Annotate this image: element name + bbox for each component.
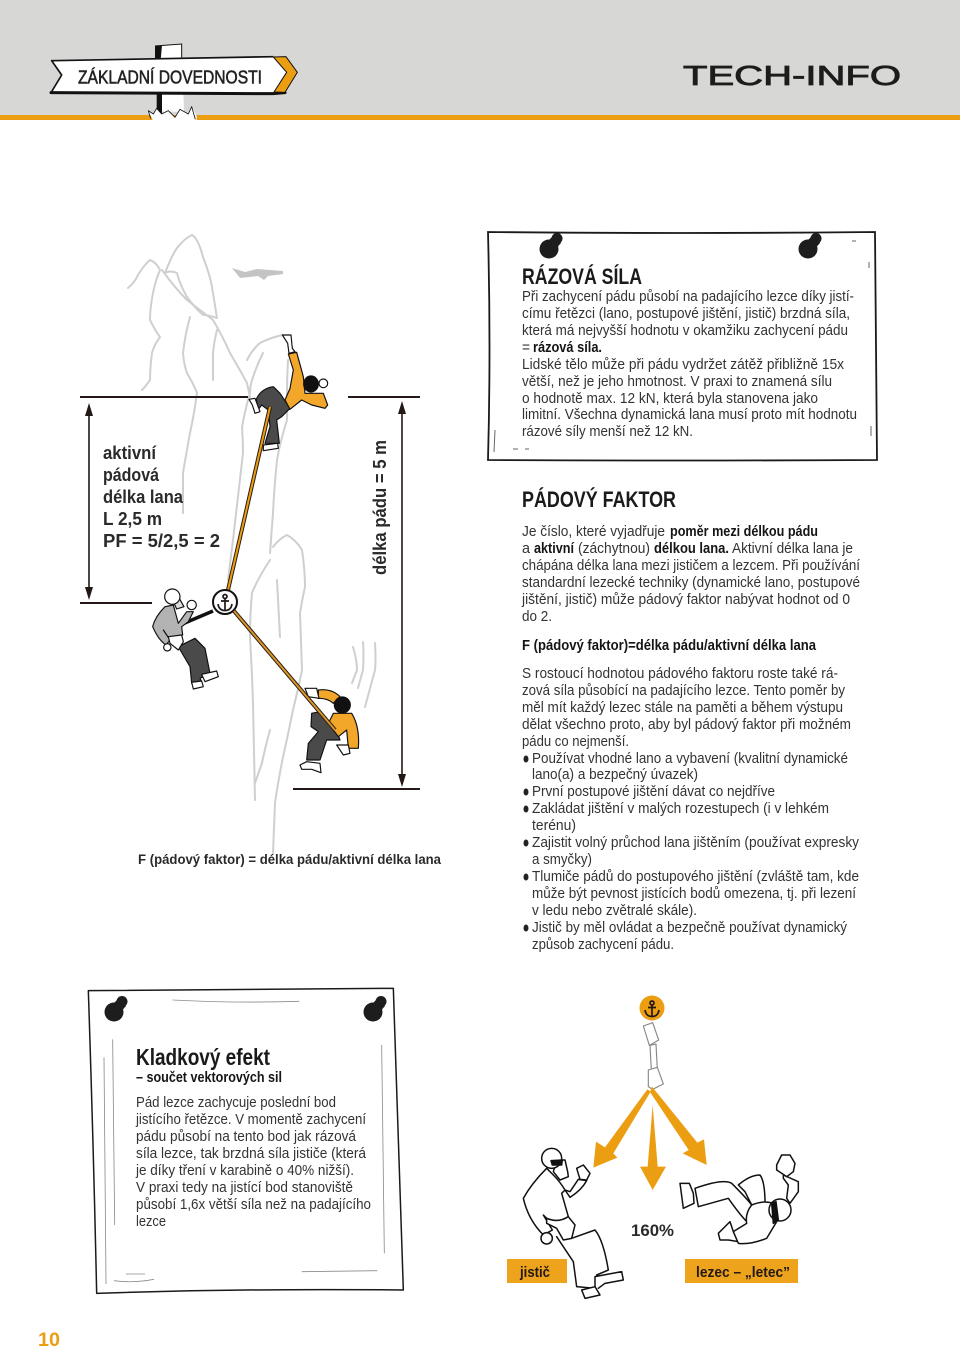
text block: která má nejvyšší hodnotu v okamžiku zachycení pádu xyxy=(522,322,848,339)
section: pádový faktor xyxy=(521,487,861,953)
mountain outlines xyxy=(128,235,376,853)
text block: rázové síly menší než 12 kN. xyxy=(522,423,693,440)
bullet list: Zajistit volný průchod lana jištěním (používat expresky xyxy=(532,834,859,851)
text block xyxy=(522,288,857,440)
pin xyxy=(540,233,562,258)
text block: poměr mezi délkou pádu xyxy=(670,523,818,540)
bullet list: lano(a) a bezpečný úvazek) xyxy=(532,766,698,783)
falling climber line drawing xyxy=(680,1155,798,1244)
force arrows xyxy=(593,1087,707,1190)
text block: chápána délka lana mezi jističem a lezcem. Při používání xyxy=(522,557,861,574)
pin xyxy=(104,996,128,1022)
label: active length xyxy=(103,443,220,551)
heading: PÁDOVÝ FAKTOR xyxy=(522,487,676,512)
text block: měl mít každý lezec stále na paměti a během výstupu xyxy=(522,699,843,716)
label: jistič xyxy=(507,1259,567,1283)
measure lines and arrows xyxy=(80,397,420,789)
label: active length: aktivní xyxy=(103,443,157,463)
bullet list: způsob zachycení pádu. xyxy=(532,936,674,953)
belayer line drawing xyxy=(523,1148,623,1298)
bullet list: Tlumiče pádů do postupového jištění (zvláště tam, kde xyxy=(532,868,859,885)
bullet list: a smyčky) xyxy=(532,851,592,868)
text block: pádu působí na tento bod jak rázová xyxy=(136,1128,357,1145)
text block: Je číslo, které vyjadřuje xyxy=(522,523,665,540)
text block: standardní lezecké techniky (dynamické lano, postupové xyxy=(522,574,860,591)
cloud xyxy=(232,268,283,280)
bullet list: terénu) xyxy=(532,817,576,834)
tech-info logo: TECH-INFO xyxy=(683,60,901,91)
label: active length: délka lana xyxy=(103,487,184,507)
label: active length: L 2,5 m xyxy=(103,509,162,529)
falling climber xyxy=(300,688,359,773)
text block: Aktivní délka lana je xyxy=(732,540,853,557)
panel: rázová síla xyxy=(488,232,877,460)
ropes xyxy=(228,407,270,590)
text block: je díky tření v karabině o 40% nižší). xyxy=(135,1162,354,1179)
text block: limitní. Všechna dynamická lana musí proto mít hodnotu xyxy=(522,406,857,423)
bullet list: První postupové jištění dávat co nejdříve xyxy=(532,783,775,800)
climber at top xyxy=(249,335,328,451)
bullet list: Jistič by měl ovládat a bezpečně používat dynamický xyxy=(532,919,847,936)
text block: = xyxy=(522,339,530,356)
anchor point xyxy=(213,590,237,614)
text block: Pád lezce zachycuje poslední bod xyxy=(136,1094,336,1111)
signpost: základní dovednosti xyxy=(51,44,297,120)
carabiners xyxy=(643,1023,663,1089)
panel: kladkový efekt xyxy=(88,988,403,1293)
text block: o hodnotě max. 12 kN, která byla stanovena jako xyxy=(522,390,818,407)
fall diagram xyxy=(80,235,441,867)
text block: rázová síla. xyxy=(533,339,602,356)
bullet list: Zakládat jištění v malých rozestupech (i v lehkém xyxy=(532,800,829,817)
header band xyxy=(0,0,960,120)
text block: pádu co nejmenší. xyxy=(522,733,629,750)
text block: Lidské tělo může při pádu vydržet zátěž přibližně 15x xyxy=(522,356,844,373)
bullet list xyxy=(524,750,859,953)
caption: fall factor formula: F (pádový faktor) = délka pádu/aktivní délka lana xyxy=(138,851,441,867)
text block xyxy=(522,665,851,750)
text block: do 2. xyxy=(522,608,552,625)
belayer xyxy=(153,589,218,689)
text block: délkou lana. xyxy=(654,540,729,557)
bullet list: Používat vhodné lano a vybavení (kvalitní dynamické xyxy=(532,750,848,767)
text block: zová síla působící na padajícího lezce. Tento poměr by xyxy=(522,682,845,699)
text block: aktivní xyxy=(534,540,575,557)
text block: a xyxy=(522,540,531,557)
signpost: základní dovednosti: ZÁKLADNÍ DOVEDNOSTI xyxy=(78,66,262,88)
pulley effect diagram xyxy=(507,996,798,1298)
bullet list: v ledu nebo zvětralé skále). xyxy=(532,902,697,919)
label: active length: PF = 5/2,5 = 2 xyxy=(103,531,220,551)
text block: jistícího řetězce. V momentě zachycení xyxy=(135,1111,367,1128)
text block: címu řetězci (lano, postupové jištění, jistič) brzdná síla, xyxy=(522,305,850,322)
percentage label: 160% xyxy=(631,1221,674,1240)
text block: síla lezce, tak brzdná síla jističe (která xyxy=(136,1145,367,1162)
text block: Při zachycení pádu působí na padajícího lezce díky jistí- xyxy=(522,288,854,305)
text block: (záchytnou) xyxy=(578,540,650,557)
text block: větší, než je jeho hmotnost. V praxi to znamená sílu xyxy=(522,373,832,390)
label: active length: pádová xyxy=(103,465,160,485)
label: lezec – letec: lezec – „letec” xyxy=(696,1264,790,1281)
text block: jištění, jistič) může pádový faktor nabývat hodnot od 0 xyxy=(521,591,850,608)
text block: lezce xyxy=(136,1213,166,1230)
label: jistič: jistič xyxy=(519,1264,550,1281)
anchor badge xyxy=(640,996,664,1020)
text block: S rostoucí hodnotou pádového faktoru roste také rá- xyxy=(522,665,838,682)
text block: V praxi tedy na jistící bod stanoviště xyxy=(136,1179,353,1196)
heading: Kladkový efekt xyxy=(136,1044,270,1070)
lower rope xyxy=(234,611,335,730)
text block xyxy=(521,523,861,625)
pin xyxy=(364,996,386,1022)
subheading: – součet vektorových sil xyxy=(136,1069,282,1086)
pin xyxy=(798,233,822,258)
label: fall length: délka pádu = 5 m xyxy=(370,440,390,575)
heading: RÁZOVÁ SÍLA xyxy=(522,264,642,289)
bullet list: může být pevnost jistících bodů omezena, tj. při lezení xyxy=(532,885,857,902)
text block: dělat všechno proto, aby byl pádový faktor při možném xyxy=(522,716,851,733)
label: lezec – letec xyxy=(685,1259,798,1283)
formula: F (pádový faktor)=délka pádu/aktivní délka lana xyxy=(522,637,817,654)
text block xyxy=(135,1094,371,1230)
text block: působí 1,6x větší síla než na padajícího xyxy=(136,1196,371,1213)
